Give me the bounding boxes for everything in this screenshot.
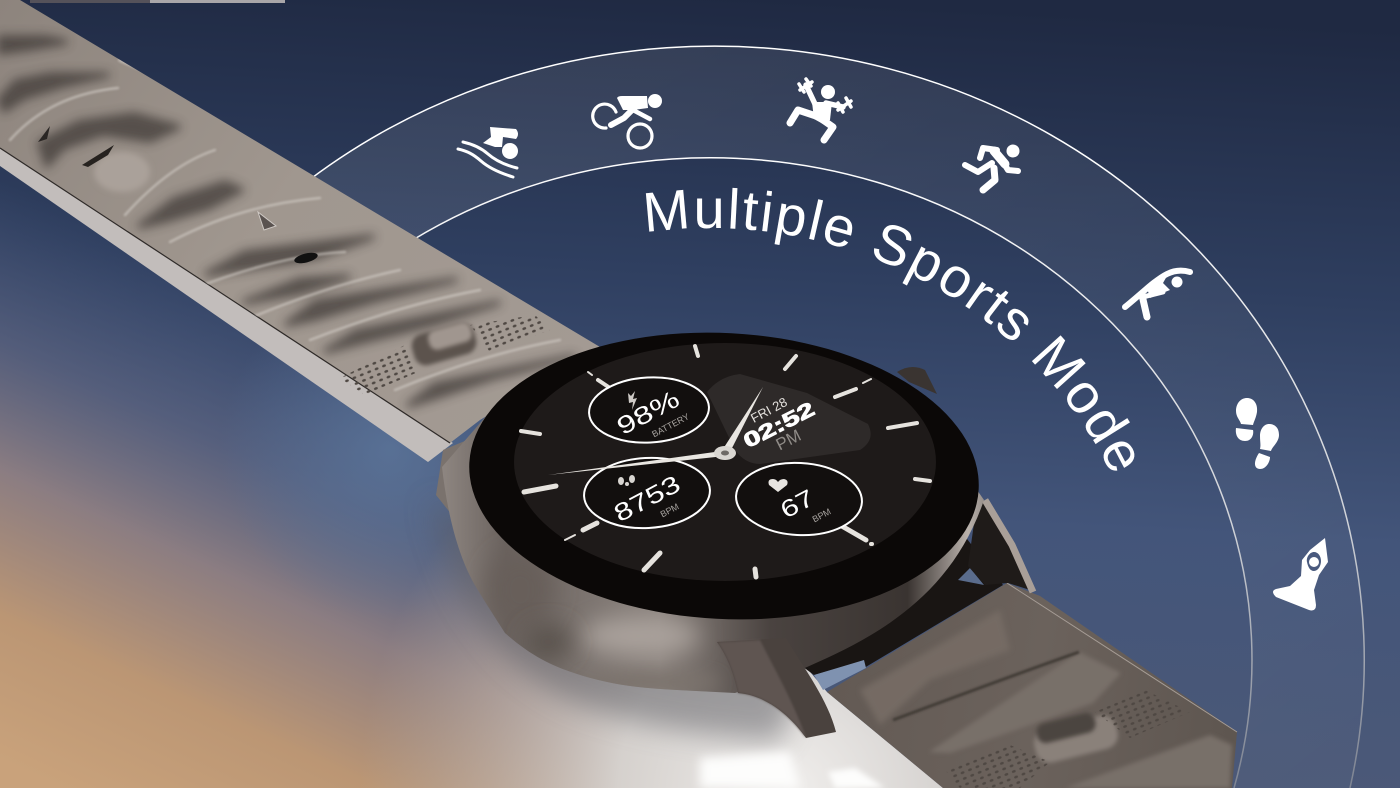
dark shadow gap between case and lower strap <box>780 530 1003 690</box>
digital date and time: 02:52 <box>740 398 818 453</box>
strap textured dot patches <box>340 315 550 395</box>
crown <box>897 367 937 394</box>
complication: heart rate <box>734 460 864 538</box>
icon: weight lifting <box>790 79 851 140</box>
icon: yoga meditation <box>1273 538 1328 610</box>
bottom lug <box>717 638 836 738</box>
watch case <box>442 415 984 738</box>
complication: heart rate: 67 <box>776 484 819 524</box>
complication: heart rate: BPM <box>811 506 833 524</box>
soft shadow of the watch on the surface <box>430 500 885 788</box>
icon: cycling <box>593 94 662 148</box>
outer arc line <box>300 46 1364 788</box>
right lug <box>968 495 1030 590</box>
watch strap: lower right <box>827 583 1237 788</box>
complication: steps: BPM <box>659 501 681 519</box>
icon: running <box>965 144 1020 190</box>
complication: battery: BATTERY <box>650 411 691 439</box>
complication: steps: 8753 <box>610 470 685 528</box>
complication: steps <box>582 455 712 531</box>
icon: stretching <box>1125 271 1190 317</box>
icon: steps <box>618 475 635 486</box>
complication: battery: 98% <box>612 385 684 441</box>
strap wrinkles <box>0 38 573 405</box>
inner arc line <box>400 158 1252 788</box>
icon: footprints <box>1236 398 1279 469</box>
strap oval bump <box>409 320 479 368</box>
watch lugs and crown <box>436 367 1033 592</box>
icon: swimming <box>458 127 518 177</box>
watch bezel <box>462 320 986 632</box>
icon: heart <box>768 479 788 492</box>
icon: lightning bolt <box>628 391 637 410</box>
digital date and time: PM <box>773 426 804 454</box>
complication: battery <box>587 374 711 446</box>
digital date and time: FRI 28 <box>748 394 790 426</box>
curved title: Multiple Sports Mode: Multiple Sports Mode <box>646 188 1134 471</box>
time panel <box>707 374 871 464</box>
watch strap: upper left <box>0 0 600 462</box>
strap small marks <box>38 126 319 265</box>
watch hands <box>548 387 763 475</box>
dial hour ticks <box>521 346 930 577</box>
watch dial <box>514 343 936 581</box>
sports icons <box>458 79 1328 610</box>
arc band holding sports icons <box>300 46 1364 788</box>
left lug <box>436 438 478 520</box>
